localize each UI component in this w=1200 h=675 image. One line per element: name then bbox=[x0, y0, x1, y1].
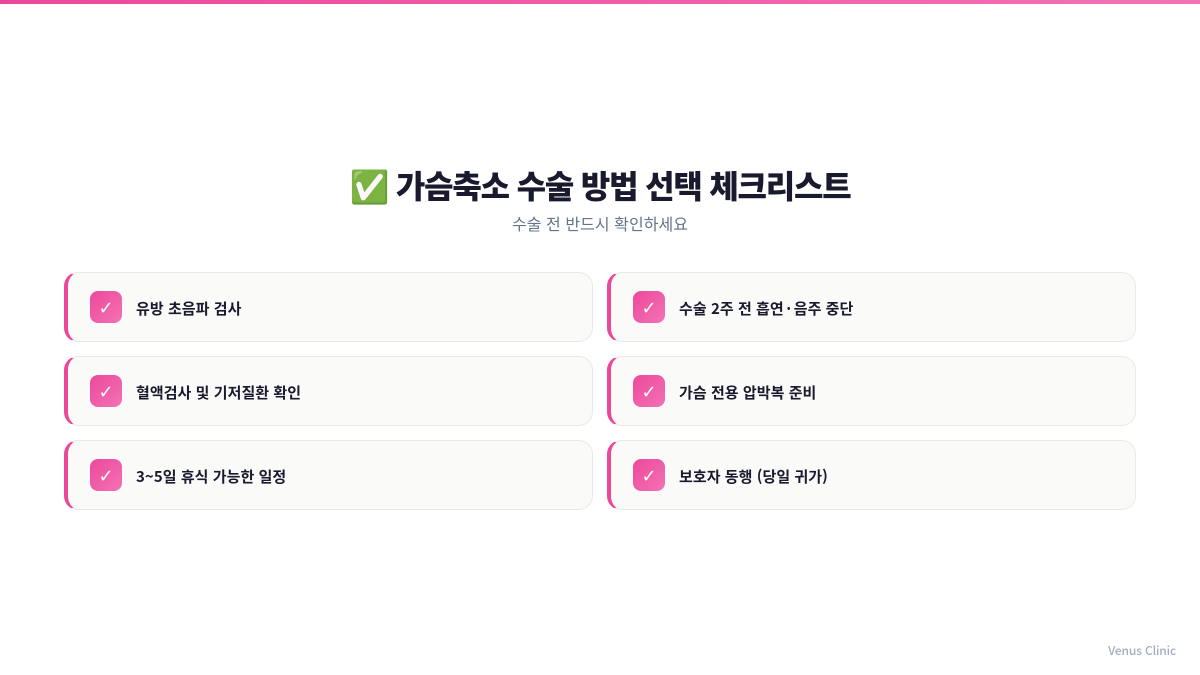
item text: 가슴 전용 압박복 준비 bbox=[679, 382, 816, 403]
top accent bar bbox=[0, 0, 1200, 4]
checklist item: rest schedule bbox=[64, 440, 593, 510]
icon: check: ✓ bbox=[641, 382, 657, 403]
checklist item: compression garment bbox=[607, 356, 1136, 426]
subtitle: 수술 전 반드시 확인하세요 bbox=[512, 211, 688, 235]
icon: check bbox=[90, 459, 122, 491]
icon: check bbox=[90, 291, 122, 323]
icon: check bbox=[90, 375, 122, 407]
icon: check: ✓ bbox=[641, 298, 657, 319]
checklist item: stop smoking and drinking bbox=[607, 272, 1136, 342]
item text: 3~5일 휴식 가능한 일정 bbox=[136, 466, 286, 487]
item text: 수술 2주 전 흡연·음주 중단 bbox=[679, 298, 853, 319]
icon: check bbox=[633, 291, 665, 323]
checklist item: guardian bbox=[607, 440, 1136, 510]
icon: check bbox=[633, 375, 665, 407]
icon: check: ✓ bbox=[641, 466, 657, 487]
icon: check: ✓ bbox=[98, 382, 114, 403]
item text: 혈액검사 및 기저질환 확인 bbox=[136, 382, 301, 403]
checklist item: breast ultrasound bbox=[64, 272, 593, 342]
icon: check: ✓ bbox=[98, 298, 114, 319]
item text: 유방 초음파 검사 bbox=[136, 298, 241, 319]
checklist item: blood test bbox=[64, 356, 593, 426]
title: ✅ 가슴축소 수술 방법 선택 체크리스트 bbox=[349, 162, 851, 208]
footer brand: Venus Clinic bbox=[1108, 642, 1176, 659]
icon: check: ✓ bbox=[98, 466, 114, 487]
item text: 보호자 동행 (당일 귀가) bbox=[679, 466, 828, 487]
icon: check bbox=[633, 459, 665, 491]
